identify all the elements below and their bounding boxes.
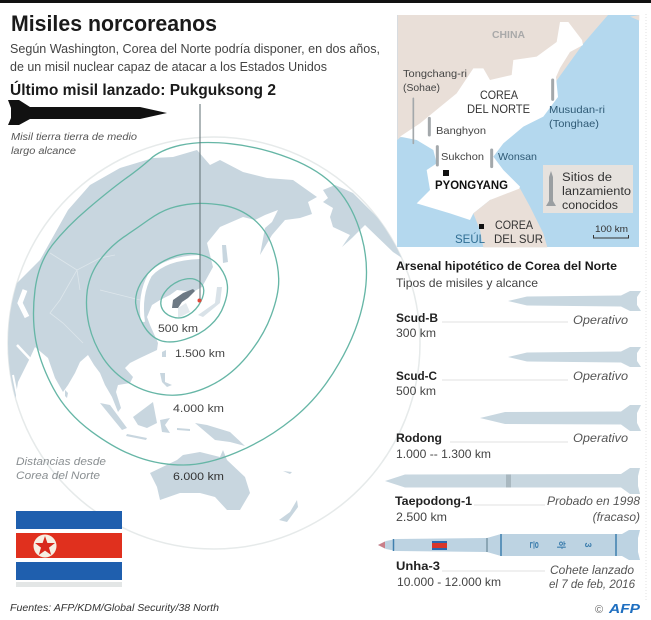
legend: known launch sites <box>543 165 633 213</box>
missile: Scud-B: Scud-B <box>396 311 438 325</box>
label: Sukchon: Sukchon <box>441 151 484 163</box>
missile: Rodong: 1.000 -- 1.300 km <box>396 447 491 461</box>
label: Pyongyang <box>435 170 508 192</box>
distance note: Distancias desde <box>16 456 106 468</box>
inland seas and borders <box>13 253 222 400</box>
missile: Rodong: Rodong <box>396 431 442 445</box>
legend: known launch sites: Sitios de <box>562 172 612 184</box>
distance note: Corea del Norte <box>16 470 100 482</box>
North Korea <box>400 22 583 220</box>
label: Corea del Norte: COREA <box>480 88 518 102</box>
AFP credit <box>595 602 641 616</box>
range label: 1.500 km: 1.500 km <box>175 348 225 360</box>
globe map with missile range rings <box>0 137 420 549</box>
AFP credit: AFP <box>608 602 641 616</box>
label: Musudan-ri <box>549 104 605 130</box>
label: Corea del Sur <box>494 218 543 246</box>
missile: Taepodong-1 <box>385 468 640 524</box>
missile: Scud-C: 500 km <box>396 384 436 398</box>
label: China: CHINA <box>492 30 525 41</box>
legend: known launch sites: lanzamiento <box>562 186 631 198</box>
label: Musudan-ri: Musudan-ri <box>549 104 605 116</box>
missile: Taepodong-1: 2.500 km <box>396 510 447 524</box>
label: Corea del Sur: COREA <box>495 218 533 232</box>
launch site markers <box>413 80 553 167</box>
landmasses <box>0 150 405 522</box>
pointer line from missile heading to launch point <box>199 104 201 299</box>
rocket: Unha-3: 은 <box>529 541 539 549</box>
missile: Taepodong-1: (fracaso) <box>593 510 640 524</box>
rocket: Unha-3 <box>378 530 640 591</box>
label: Pyongyang: PYONGYANG <box>435 180 508 192</box>
missile: Scud-B: Operativo <box>573 313 628 327</box>
missile caption: largo alcance <box>11 146 76 157</box>
missile: Scud-B: 300 km <box>396 326 436 340</box>
South Korea <box>473 188 547 247</box>
scale bar: 100 km: 100 km <box>595 224 628 234</box>
missile: Scud-C <box>396 347 641 398</box>
icon: black Pukguksong 2 missile <box>8 100 167 125</box>
label: Corea del Norte <box>467 88 530 116</box>
missile: Rodong <box>396 405 641 461</box>
rocket: Unha-3: el 7 de feb, 2016 <box>549 577 635 591</box>
heading: last missile launched: Último misil lanzado: Pukguksong 2 <box>10 80 276 99</box>
rocket: Unha-3: 하 <box>556 541 567 550</box>
heading: hypothetical arsenal: Arsenal hipotético de Corea del Norte <box>396 259 617 273</box>
heading: hypothetical arsenal <box>396 259 617 290</box>
legend: known launch sites: conocidos <box>562 200 618 212</box>
rocket: Unha-3: 3 <box>583 542 593 548</box>
title: Misiles norcoreanos <box>11 11 217 36</box>
missile: Scud-C: Scud-C <box>396 369 437 383</box>
Japan <box>198 287 222 317</box>
subtitle: Según Washington, Corea del Norte podría disponer, en dos años, <box>10 42 380 56</box>
missile caption <box>11 132 137 157</box>
rocket: Unha-3: 10.000 - 12.000 km <box>397 575 501 589</box>
sea <box>397 15 639 247</box>
globe disc <box>8 137 420 549</box>
sources: Fuentes: AFP/KDM/Global Security/38 North <box>10 602 219 614</box>
missile: Scud-C: Operativo <box>573 369 628 383</box>
South Korea <box>178 303 190 318</box>
missile: Taepodong-1: Probado en 1998 <box>547 494 640 508</box>
label: Seúl <box>455 224 486 246</box>
label: Tongchang-ri: (Sohae) <box>403 82 440 94</box>
subtitle <box>10 42 380 74</box>
rocket: Unha-3: Cohete lanzado <box>550 563 634 577</box>
range label: 4.000 km: 4.000 km <box>173 403 224 415</box>
distance note <box>16 456 106 482</box>
scale bar: 100 km <box>594 224 628 238</box>
label: Corea del Sur: DEL SUR <box>494 232 543 246</box>
label: Wonsan: Wonsan <box>498 151 537 163</box>
heading: hypothetical arsenal: Tipos de misiles y alcance <box>396 276 538 290</box>
missile: Scud-B <box>396 291 641 340</box>
range label: 500 km: 500 km <box>158 323 198 335</box>
AFP credit: © <box>595 604 603 616</box>
North Korea <box>172 289 195 308</box>
panel: map of North Korea launch sites <box>397 15 639 247</box>
missile caption: Misil tierra tierra de medio <box>11 132 137 143</box>
China and Russia <box>397 15 608 140</box>
range rings <box>33 142 367 465</box>
missile: Rodong: Operativo <box>573 431 628 445</box>
label: Tongchang-ri: Tongchang-ri <box>403 68 467 80</box>
missile: Taepodong-1: Taepodong-1 <box>395 494 472 508</box>
range label: 6.000 km: 6.000 km <box>173 471 224 483</box>
label: Musudan-ri: (Tonghae) <box>549 118 599 130</box>
label: Tongchang-ri <box>403 68 467 94</box>
label: Corea del Norte: DEL NORTE <box>467 102 530 116</box>
label: Seúl: SEÚL <box>455 233 486 246</box>
North Korean flag <box>16 511 122 587</box>
rocket: Unha-3: Unha-3 <box>396 559 440 573</box>
subtitle: de un misil nuclear capaz de atacar a los Estados Unidos <box>10 60 327 74</box>
launch point marker <box>198 298 202 302</box>
label: Banghyon: Banghyon <box>436 125 486 137</box>
